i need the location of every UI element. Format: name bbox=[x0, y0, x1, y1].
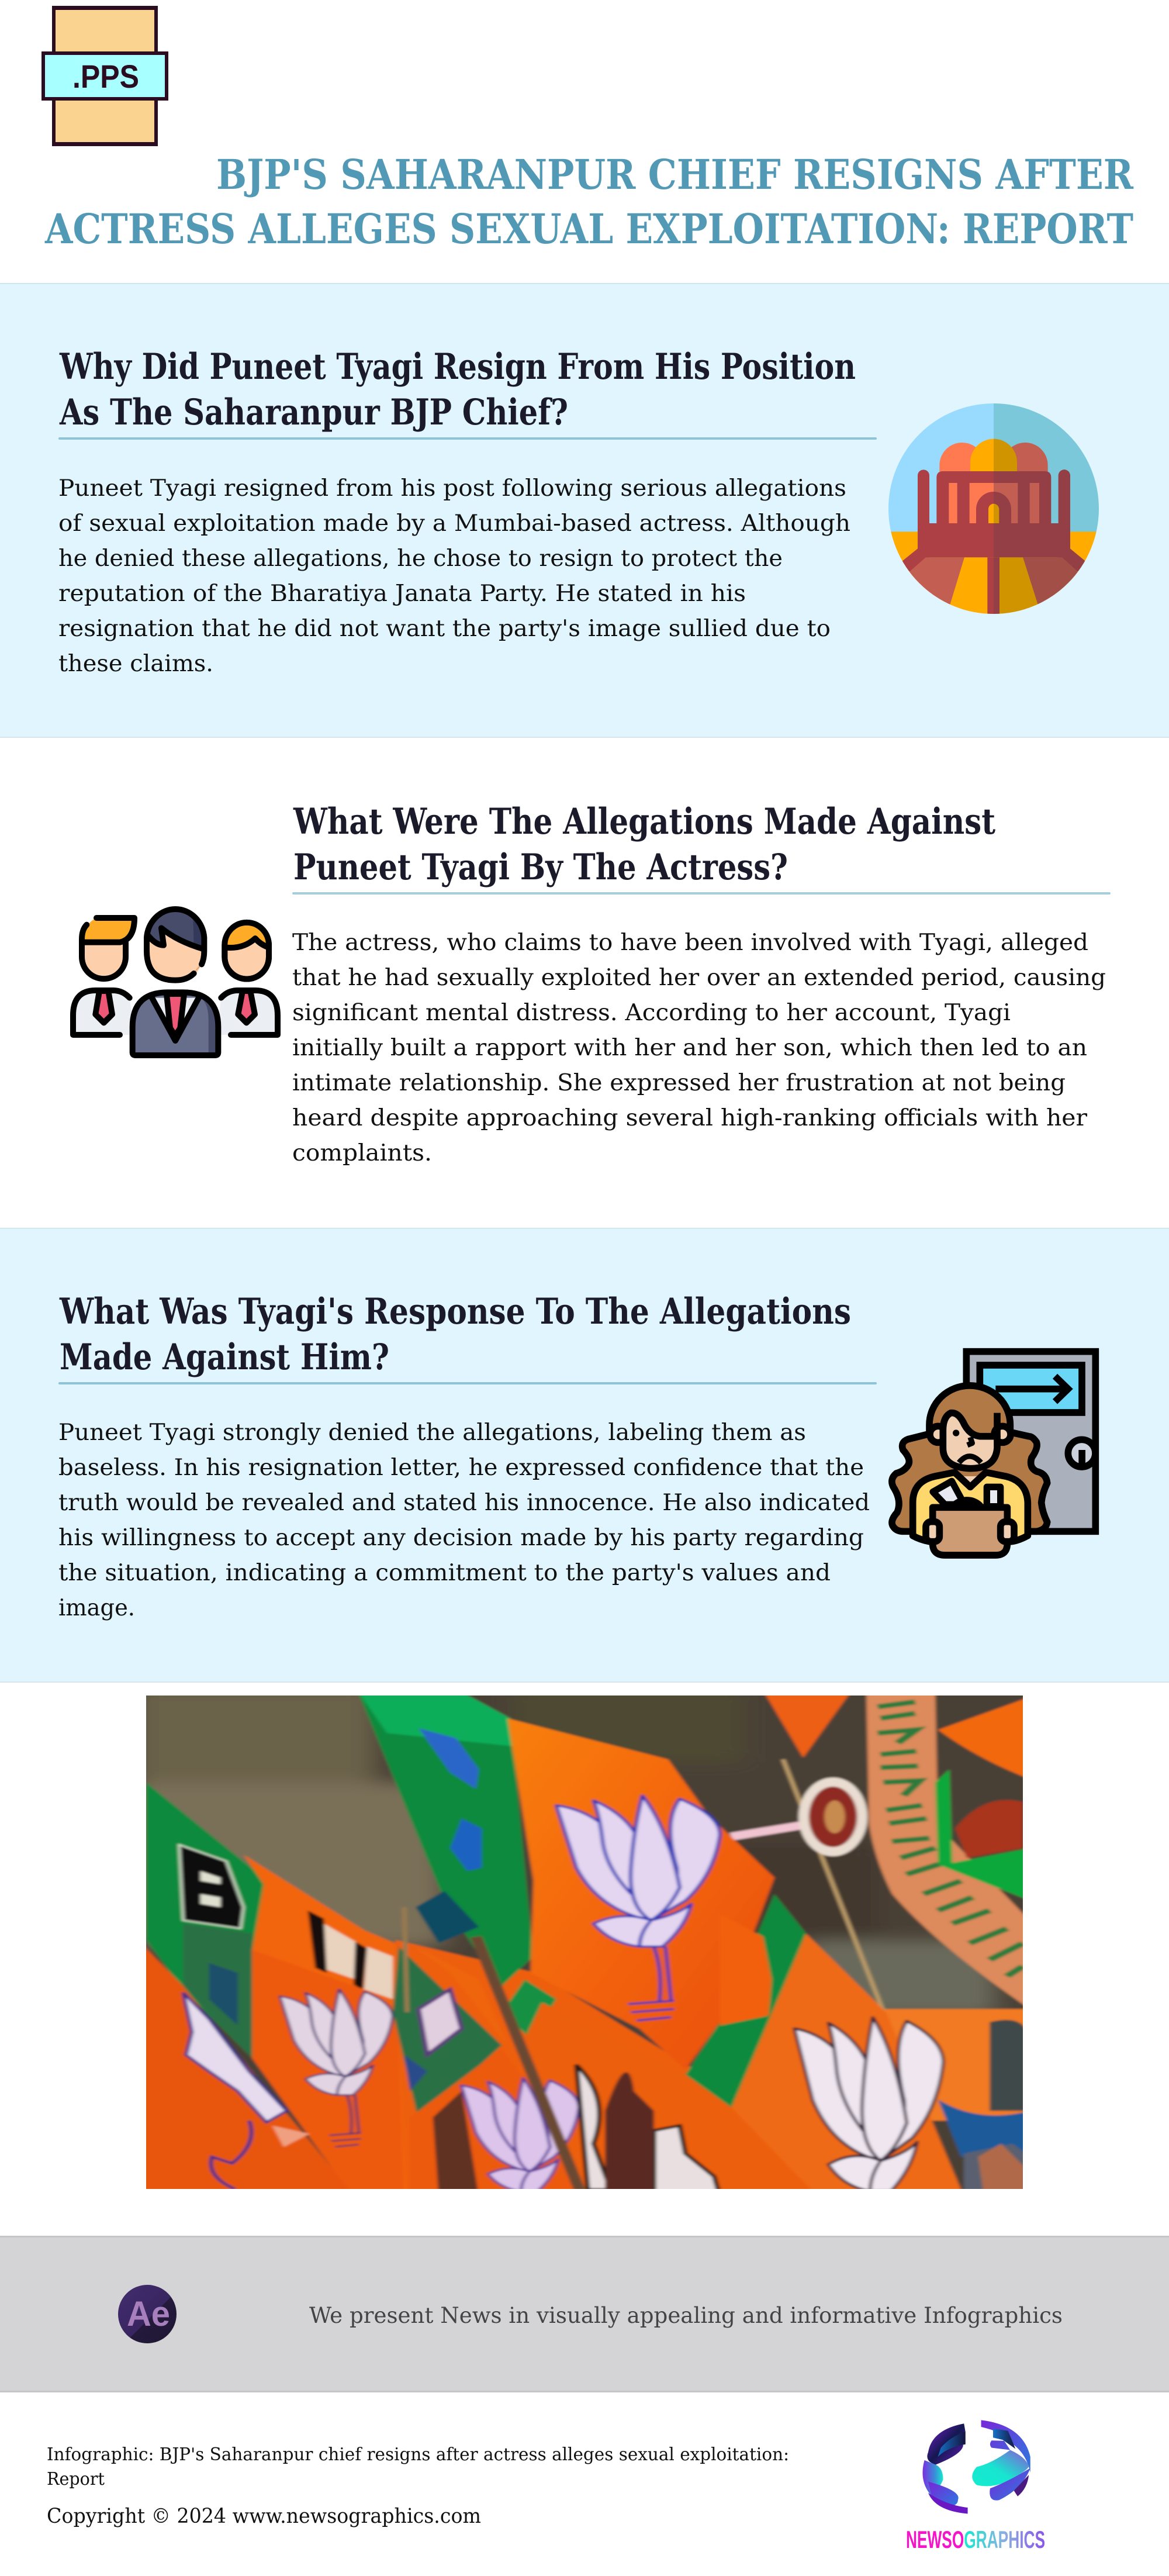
heading: his response: What Was Tyagi's Response To The Allegations bbox=[59, 1291, 851, 1332]
logo: Newsographics mark: NEWSOGRAPHICS bbox=[906, 2526, 1045, 2553]
text block: the allegations: intimate relationship. She expressed her frustration at not being bbox=[292, 1070, 1066, 1096]
icon: After Effects badge bbox=[118, 2285, 177, 2343]
heading: the allegations bbox=[293, 801, 995, 888]
text block: why he resigned: reputation of the Bharatiya Janata Party. He stated in his bbox=[58, 581, 746, 607]
text block: why he resigned: resignation that he did not want the party's image sullied due to bbox=[58, 616, 831, 642]
heading: his response: Made Against Him? bbox=[60, 1337, 389, 1378]
heading: the allegations: Puneet Tyagi By The Actress? bbox=[293, 847, 788, 888]
logo: Newsographics mark bbox=[906, 2420, 1045, 2553]
text block: the allegations: that he had sexually exploited her over an extended period, causing bbox=[292, 965, 1106, 991]
text block: why he resigned: of sexual exploitation made by a Mumbai-based actress. Although bbox=[58, 510, 850, 537]
text block: the allegations: significant mental distress. According to her account, Tyagi bbox=[292, 1000, 1011, 1026]
panel: why he resigned bbox=[0, 283, 1169, 738]
credit line: Report bbox=[47, 2469, 105, 2489]
left green flag bbox=[146, 1783, 269, 2058]
text block: the allegations: heard despite approaching several high-ranking officials with her bbox=[292, 1105, 1087, 1131]
band: tagline bbox=[0, 2236, 1169, 2392]
heading: the allegations: What Were The Allegations Made Against bbox=[293, 801, 995, 842]
heading: why he resigned bbox=[59, 346, 856, 433]
panel: his response bbox=[0, 1228, 1169, 1683]
main flag bbox=[507, 1718, 774, 2070]
text block: his response bbox=[58, 1420, 870, 1621]
footer bbox=[47, 2420, 1045, 2553]
tagline text: We present News in visually appealing and informative Infographics bbox=[309, 2303, 1063, 2328]
icon: PPS document logo bbox=[43, 6, 167, 146]
small green flag bbox=[393, 1946, 502, 2121]
hoist green of main flag bbox=[357, 1690, 533, 1986]
text block: the allegations bbox=[292, 930, 1106, 1166]
underlying orange of lower centre bbox=[393, 1939, 733, 2189]
far-left orange flag bbox=[146, 1946, 350, 2189]
icon: person leaving with box bbox=[892, 1352, 1095, 1555]
text block: why he resigned: these claims. bbox=[58, 651, 213, 677]
credit line: Infographic: BJP's Saharanpur chief resigns after actress alleges sexual exploitation: bbox=[47, 2444, 789, 2465]
text block: his response: Puneet Tyagi strongly denied the allegations, labeling them as bbox=[58, 1420, 806, 1446]
text block: why he resigned: Puneet Tyagi resigned from his post following serious allegations bbox=[58, 475, 846, 502]
text block: why he resigned bbox=[58, 475, 850, 677]
text block: the allegations: complaints. bbox=[292, 1140, 432, 1166]
text block: his response: his willingness to accept any decision made by his party regarding bbox=[58, 1525, 864, 1551]
heading: why he resigned: Why Did Puneet Tyagi Resign From His Position bbox=[59, 346, 856, 388]
lower centre flag bbox=[525, 2002, 818, 2196]
mid-left orange flag bbox=[242, 1855, 400, 2164]
text block: his response: truth would be revealed and stated his innocence. He also indicated bbox=[58, 1490, 870, 1516]
photo: BJP flags with lotus symbol bbox=[146, 1696, 1023, 2189]
copyright: Copyright © 2024 www.newsographics.com bbox=[47, 2505, 481, 2528]
poles and badge bbox=[783, 1759, 886, 2019]
lotus symbols bbox=[556, 1795, 720, 2021]
credit line bbox=[47, 2444, 789, 2489]
poles and raised hands bbox=[476, 1937, 582, 2196]
text block: his response: baseless. In his resignation letter, he expressed confidence that the bbox=[58, 1455, 864, 1481]
heading: why he resigned: As The Saharanpur BJP Chief? bbox=[59, 392, 568, 433]
far right orange and person bbox=[881, 2009, 1030, 2121]
icon: temple bbox=[884, 402, 1103, 620]
text block: why he resigned: he denied these allegations, he chose to resign to protect the bbox=[58, 545, 783, 572]
icon: After Effects badge: Ae bbox=[127, 2294, 170, 2333]
lower right flag bbox=[731, 1933, 964, 2196]
title bbox=[44, 150, 1134, 253]
panel: the allegations bbox=[0, 738, 1169, 1228]
icon: three businessmen bbox=[73, 909, 278, 1055]
heading: his response bbox=[59, 1291, 851, 1378]
text block: the allegations: initially built a rapport with her and her son, which then led to an bbox=[292, 1035, 1087, 1061]
text block: his response: image. bbox=[58, 1595, 135, 1621]
text block: the allegations: The actress, who claims to have been involved with Tyagi, alleged bbox=[292, 930, 1088, 956]
icon: PPS document logo: .PPS bbox=[72, 58, 139, 95]
text block: his response: the situation, indicating a commitment to the party's values and bbox=[58, 1560, 831, 1586]
header bbox=[0, 0, 1169, 283]
green strips bbox=[686, 1894, 806, 2108]
banner bbox=[866, 1690, 1030, 2009]
